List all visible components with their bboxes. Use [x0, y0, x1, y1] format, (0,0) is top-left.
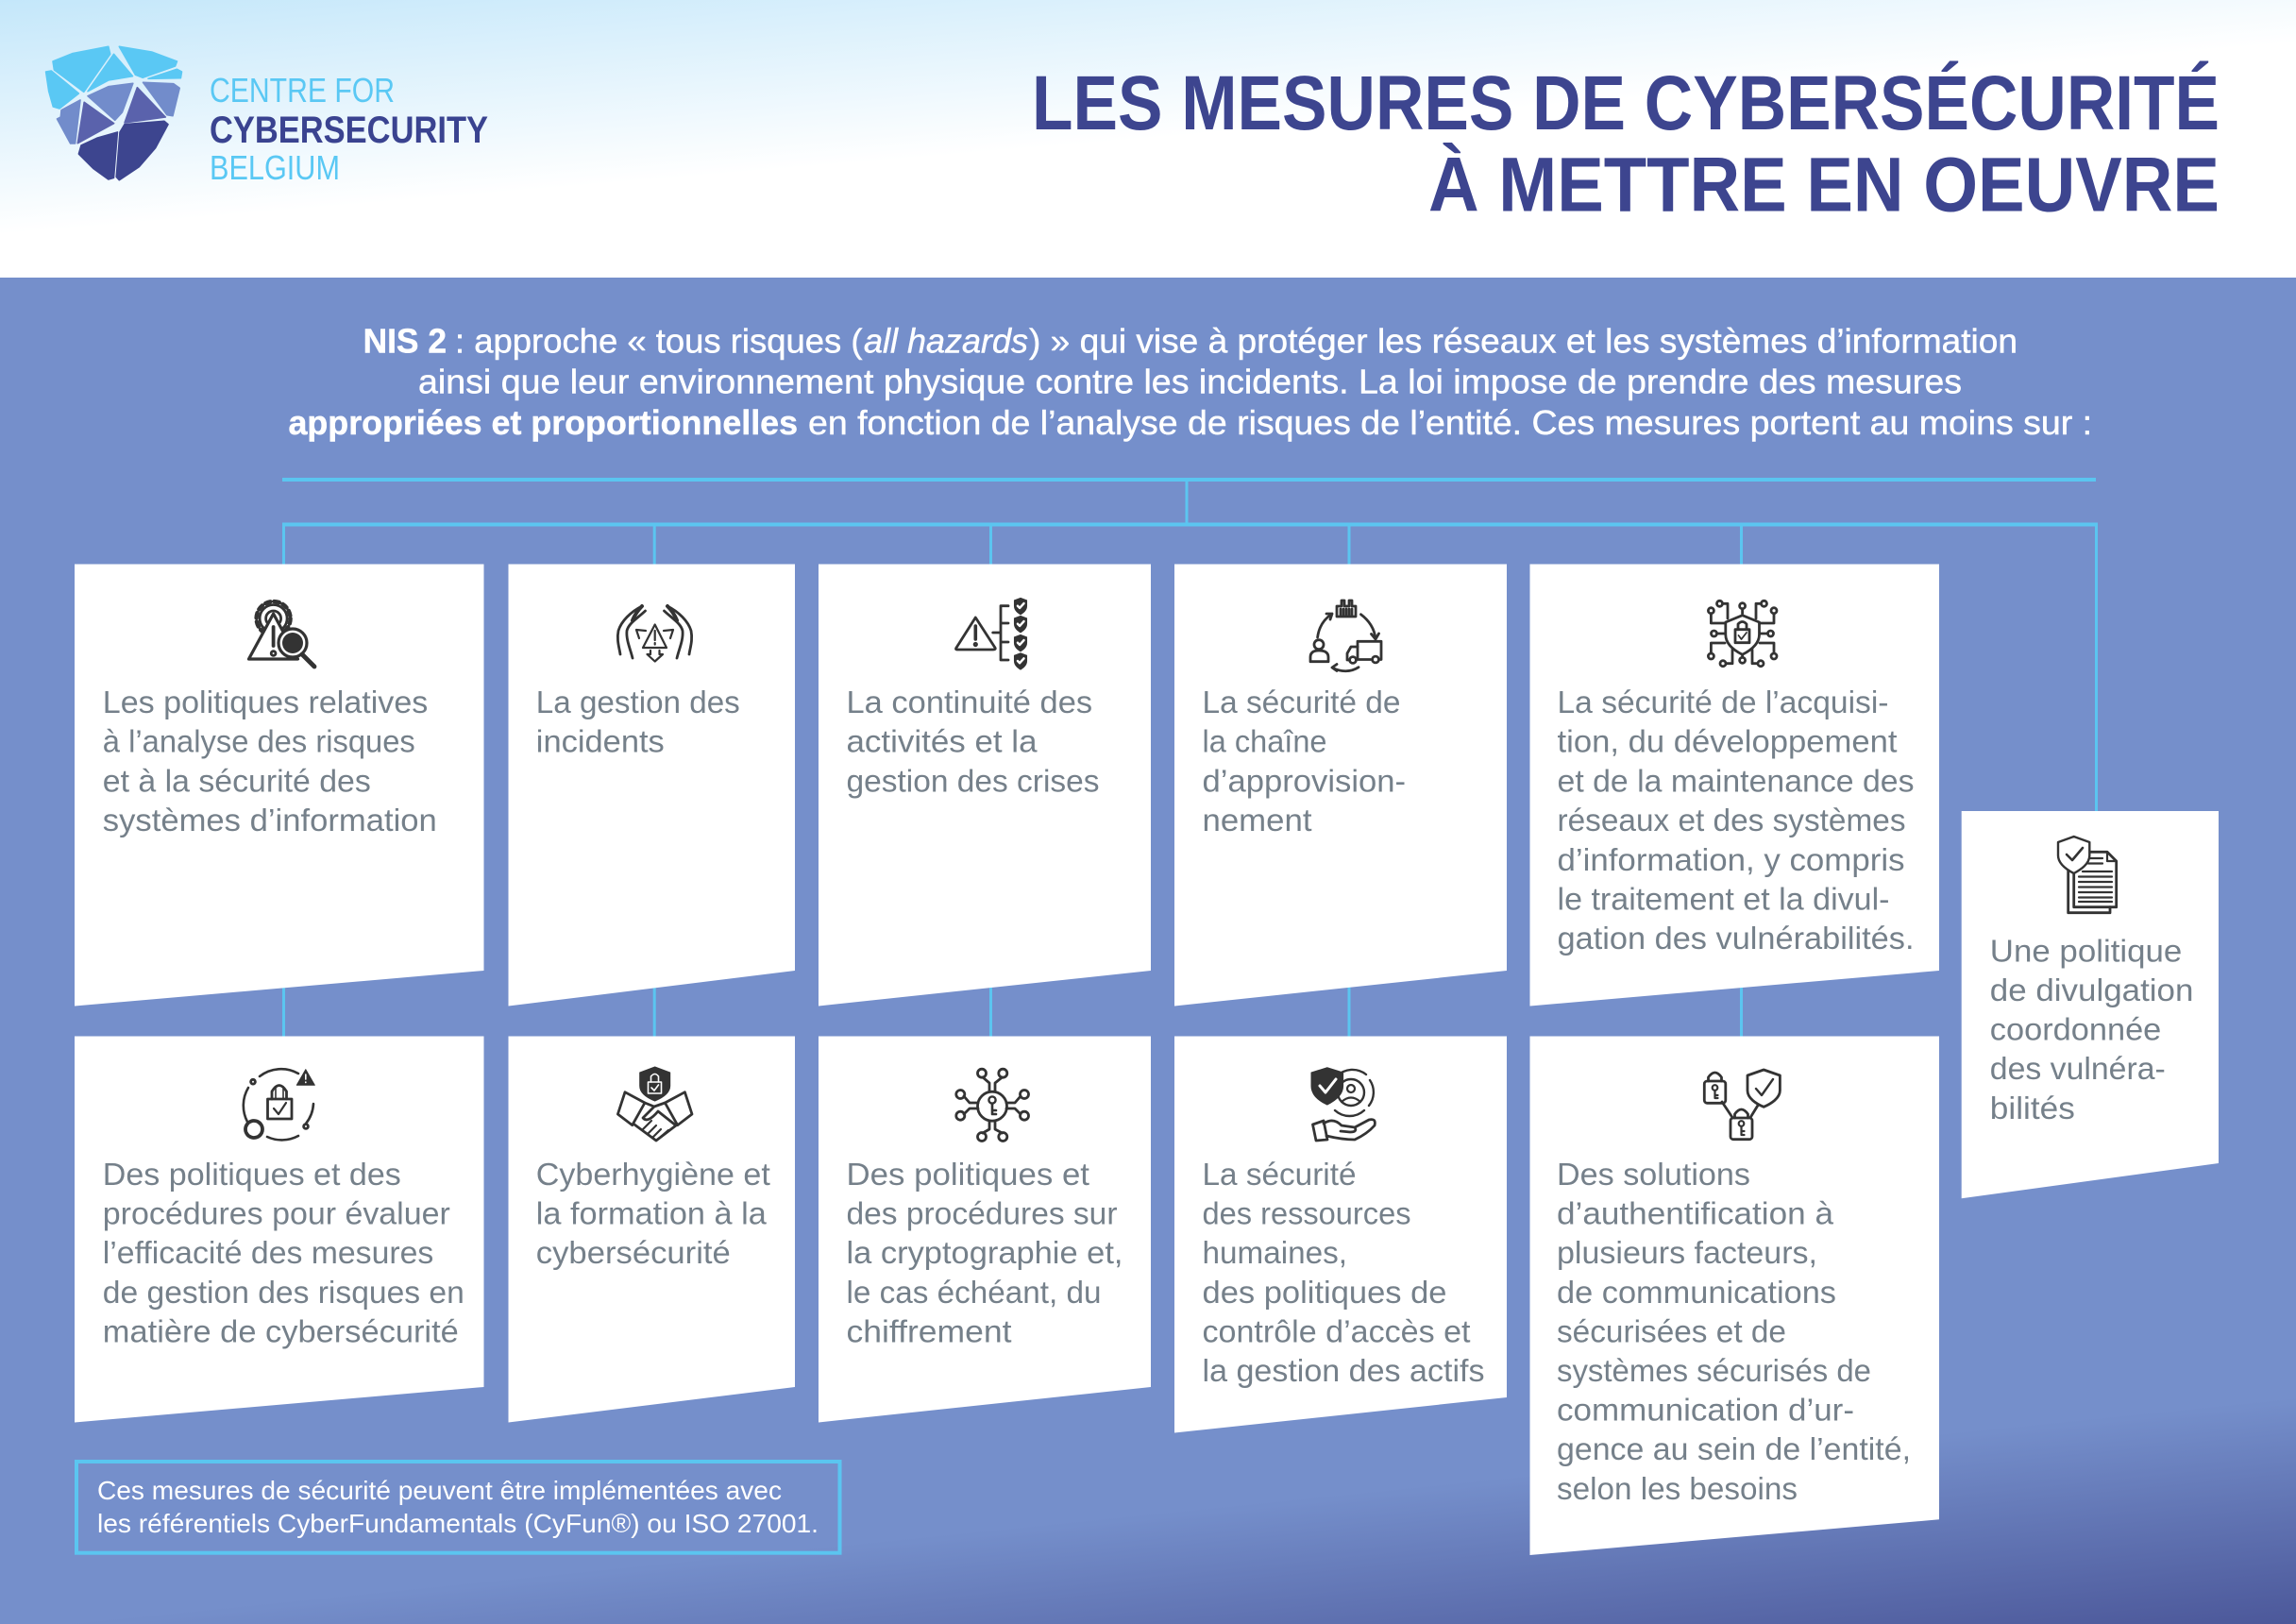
icon: key in a network	[956, 1069, 1029, 1141]
panel: coordinated vulnerability disclosure	[1962, 811, 2219, 1198]
text: d’authentification à	[1557, 1196, 1834, 1231]
text: des politiques de	[1203, 1275, 1446, 1310]
panel: multi-factor authentication and secure communications	[1529, 1037, 1939, 1555]
logo wordmark: CENTRE FOR	[210, 71, 395, 110]
logo wordmark: CYBERSECURITY	[210, 110, 488, 151]
text: bilités	[1990, 1091, 2075, 1125]
text: matière de cybersécurité	[103, 1313, 459, 1348]
text: gence au sein de l’entité,	[1557, 1431, 1911, 1466]
text: procédures pour évaluer	[103, 1196, 450, 1231]
callout: reference frameworks	[76, 1462, 840, 1553]
text: La sécurité de	[1203, 685, 1401, 719]
panel: effectiveness evaluation	[75, 1037, 483, 1422]
introduction text: ) » qui vise à protéger les réseaux et les systèmes d’information	[1029, 321, 2017, 360]
text: La continuité des	[846, 685, 1092, 719]
icon: padlock in a ring with warning and gear	[244, 1069, 314, 1140]
introduction text: en fonction de l’analyse de risques de l’entité. Ces mesures portent au moins sur :	[808, 403, 2092, 442]
text: de gestion des risques en	[103, 1275, 464, 1310]
introduction text: NIS 2	[363, 321, 447, 360]
text: la cryptographie et,	[846, 1235, 1123, 1270]
icon: warning triangle with checklist shields	[955, 598, 1027, 670]
text: la formation à la	[536, 1196, 767, 1231]
text	[536, 1157, 770, 1270]
text: Cyberhygiène et	[536, 1157, 770, 1192]
text: La sécurité de l’acquisi-	[1558, 685, 1888, 719]
text	[846, 685, 1099, 798]
text: incidents	[536, 724, 665, 759]
text: le traitement et la divul-	[1558, 882, 1890, 916]
text: La gestion des	[536, 685, 740, 719]
panel: business continuity	[819, 565, 1151, 1007]
text: la gestion des actifs	[1203, 1353, 1484, 1388]
callout: reference frameworks: les référentiels CyberFundamentals (CyFun®) ou ISO 27001.	[97, 1509, 819, 1538]
text: cybersécurité	[536, 1235, 731, 1270]
panel: incident management	[508, 565, 795, 1007]
connector tree	[282, 478, 2098, 1039]
text: La sécurité	[1203, 1157, 1356, 1192]
text	[846, 1157, 1123, 1348]
text: réseaux et des systèmes	[1558, 803, 1905, 837]
text: et à la sécurité des	[103, 763, 371, 798]
text: systèmes d’information	[103, 803, 437, 837]
text: l’efficacité des mesures	[103, 1235, 433, 1270]
text: chiffrement	[846, 1313, 1012, 1348]
icon: hands around alert triangle	[617, 606, 692, 661]
introduction text: all hazards	[864, 321, 1028, 360]
logo wordmark: BELGIUM	[210, 148, 340, 187]
text: Une politique	[1990, 933, 2182, 968]
introduction text	[289, 321, 2092, 442]
text	[103, 685, 437, 837]
icon: shield with padlock on circuit	[1708, 601, 1777, 667]
text: d’information, y compris	[1558, 842, 1905, 877]
panel: supply chain security	[1174, 565, 1507, 1007]
text: Des solutions	[1557, 1157, 1750, 1192]
text	[103, 1157, 464, 1348]
text: contrôle d’accès et	[1203, 1313, 1471, 1348]
text	[1558, 685, 1915, 956]
header background	[0, 0, 2296, 279]
text: tion, du développement	[1558, 724, 1898, 759]
text: gation des vulnérabilités.	[1558, 921, 1915, 956]
icon: factory, truck and person in a cycle	[1310, 601, 1381, 671]
text: de divulgation	[1990, 973, 2193, 1007]
logo shield	[46, 46, 181, 180]
text: activités et la	[846, 724, 1038, 759]
icon: handshake with shield	[617, 1067, 692, 1141]
text: des vulnéra-	[1990, 1051, 2166, 1086]
panel: human resources, access control and assets	[1174, 1037, 1507, 1433]
text: la chaîne	[1203, 724, 1327, 759]
icon: padlocks and shield	[1704, 1070, 1780, 1140]
logo: Centre for Cybersecurity Belgium	[46, 46, 488, 187]
text: sécurisées et de	[1557, 1313, 1786, 1348]
introduction text: : approche « tous risques (	[455, 321, 863, 360]
text	[1203, 685, 1406, 837]
text: et de la maintenance des	[1558, 763, 1915, 798]
logo wordmark	[210, 71, 488, 187]
text: le cas échéant, du	[846, 1275, 1101, 1310]
introduction text: appropriées et proportionnelles	[289, 403, 798, 442]
icon: shield, person and hand	[1311, 1068, 1375, 1141]
text: d’approvision-	[1203, 763, 1406, 798]
panel: cryptography and encryption	[819, 1037, 1151, 1422]
icon: shield and document	[2058, 837, 2117, 913]
text: coordonnée	[1990, 1012, 2161, 1047]
text: Des politiques et	[846, 1157, 1089, 1192]
text: selon les besoins	[1557, 1471, 1798, 1506]
text: humaines,	[1203, 1235, 1347, 1270]
text	[536, 685, 740, 759]
title: À METTRE EN OEUVRE	[1428, 142, 2220, 228]
text	[1990, 933, 2193, 1125]
text: nement	[1203, 803, 1312, 837]
text: communication d’ur-	[1557, 1393, 1854, 1428]
text: plusieurs facteurs,	[1557, 1235, 1817, 1270]
text: systèmes sécurisés de	[1557, 1353, 1871, 1388]
text: Des politiques et des	[103, 1157, 401, 1192]
panel: risk analysis policies	[75, 565, 483, 1007]
icon: warning triangle, gear and magnifier	[249, 601, 314, 667]
title	[1032, 60, 2220, 228]
text: gestion des crises	[846, 763, 1099, 798]
panel: acquisition, development and maintenance	[1529, 565, 1939, 1007]
text: des ressources	[1203, 1196, 1410, 1231]
text: à l’analyse des risques	[103, 724, 415, 759]
text: de communications	[1557, 1275, 1836, 1310]
text	[1203, 1157, 1484, 1388]
introduction text: ainsi que leur environnement physique contre les incidents. La loi impose de prendre des mesures	[418, 363, 1962, 401]
callout: reference frameworks: Ces mesures de sécurité peuvent être implémentées avec	[97, 1476, 782, 1505]
text: des procédures sur	[846, 1196, 1118, 1231]
panel: cyber hygiene and training	[508, 1037, 795, 1422]
text: Les politiques relatives	[103, 685, 428, 719]
text	[1557, 1157, 1911, 1506]
